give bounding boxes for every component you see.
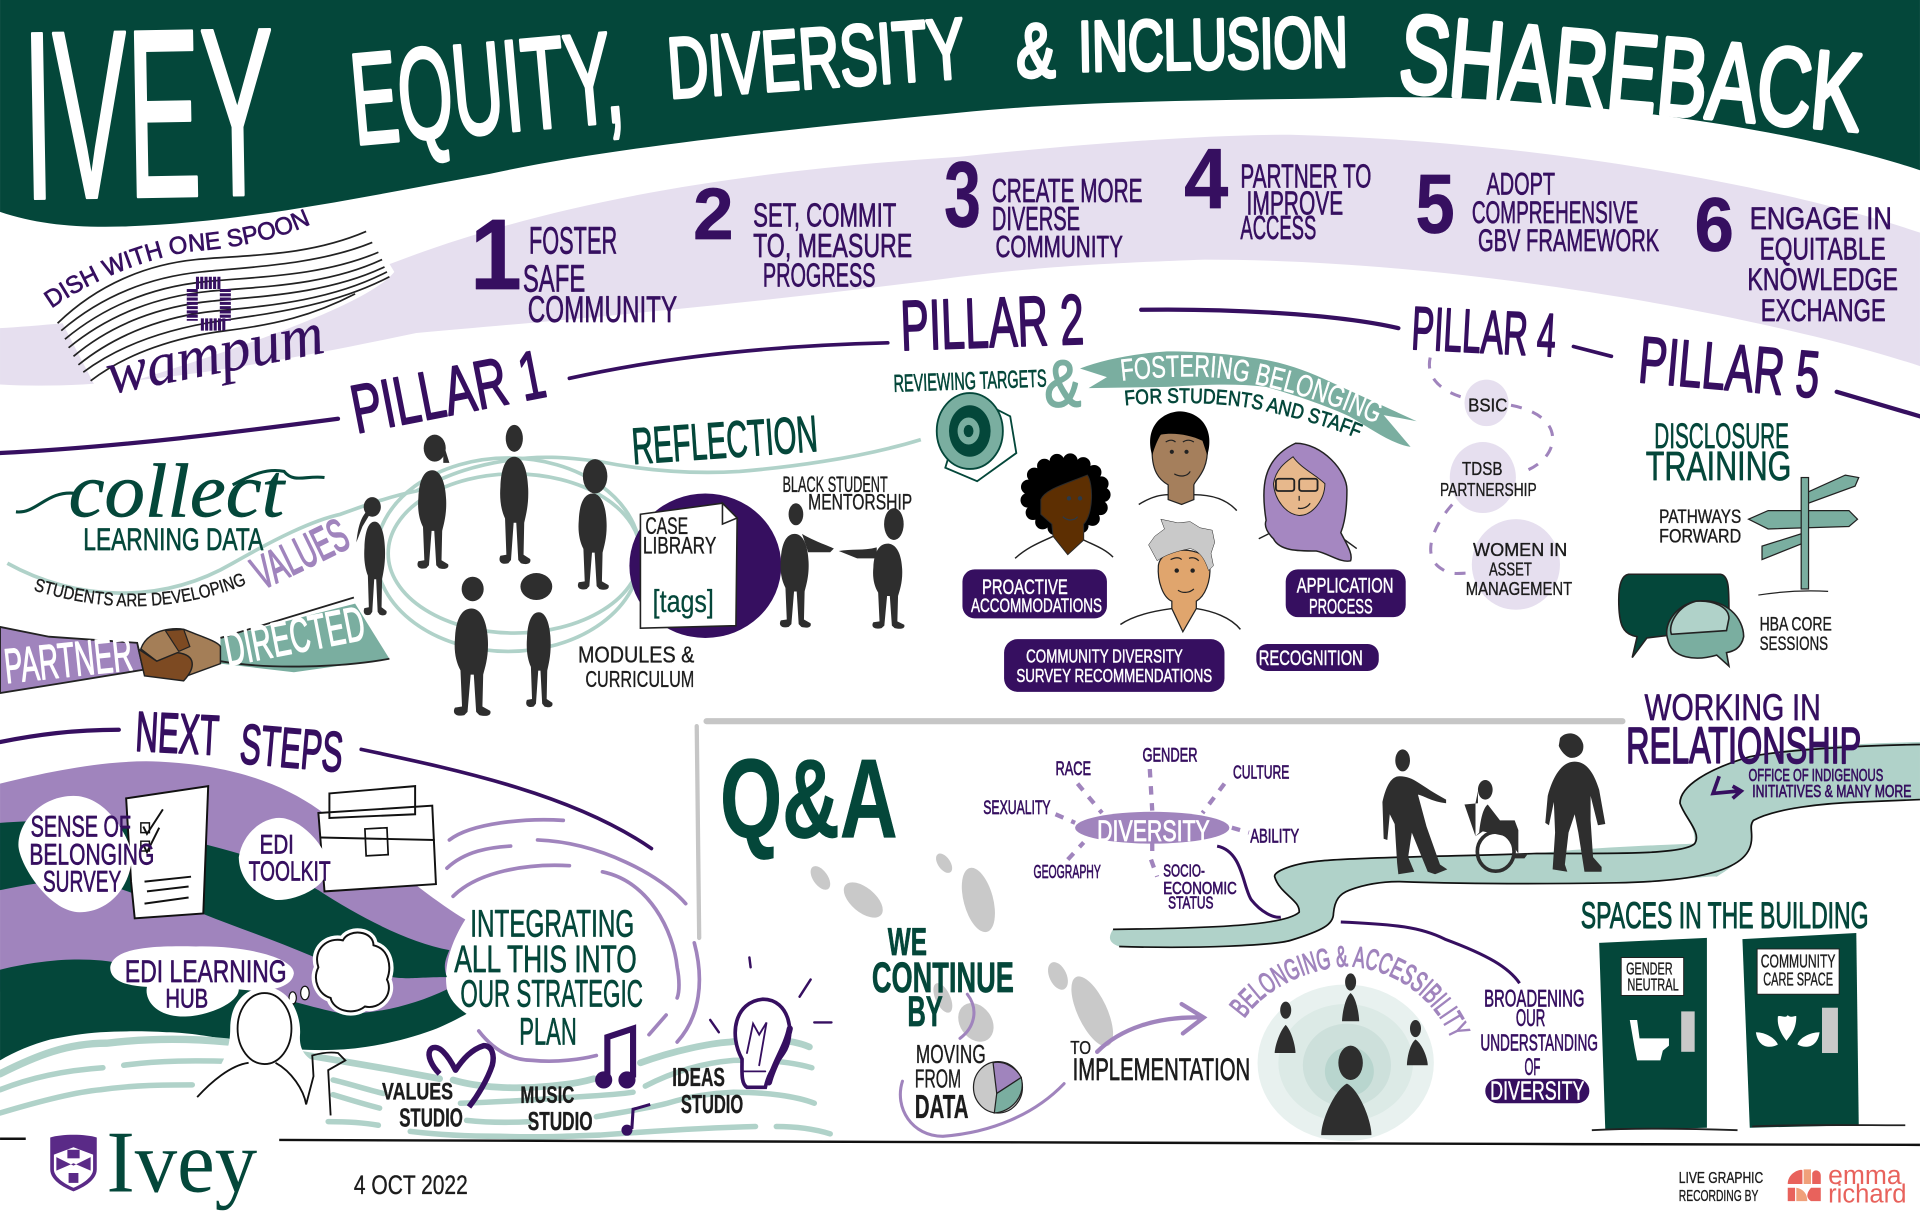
label: modules and curriculum: MODULES & (578, 641, 695, 667)
teal ampersand: & (1044, 348, 1081, 422)
pill: proactive accommodations (962, 569, 1107, 618)
priority 6 (1695, 183, 1898, 328)
priority 2 (693, 172, 912, 295)
mentorship figures (780, 503, 904, 629)
pill: proactive accommodations: ACCOMMODATIONS (971, 595, 1102, 617)
music studio (520, 1082, 593, 1136)
diversity web: SEXUALITY (983, 797, 1051, 819)
heading: learning data: LEARNING DATA (83, 521, 264, 557)
pillar 4 list: WOMEN IN (1473, 539, 1567, 560)
label: black student mentorship: BLACK STUDENT (782, 472, 888, 497)
text: moving from data: DATA (915, 1089, 969, 1126)
text: broadening our understanding of diversity: BROADENING (1484, 985, 1584, 1012)
label: hba core sessions (1760, 614, 1832, 655)
text: moving from data: MOVING (916, 1041, 986, 1069)
door: community care space: CARE SPACE (1763, 969, 1833, 990)
ideas studio: STUDIO (681, 1091, 743, 1119)
floor lines (1592, 1125, 1905, 1130)
icon: pie chart (973, 1062, 1022, 1113)
diversity web (983, 745, 1299, 917)
icon: thought cloud (289, 933, 389, 1011)
priority 3: COMMUNITY (996, 230, 1123, 264)
label: black student mentorship (782, 472, 912, 514)
pillar 4 list: PARTNERSHIP (1440, 479, 1537, 500)
icon: dish with one spoon wampum (58, 228, 394, 392)
pillar 4 list: ASSET (1489, 558, 1532, 579)
diversity web: DIVERSITY (1097, 815, 1210, 848)
handshake: partner directed: PARTNER (2, 627, 135, 694)
pill: community diversity survey recommendations (1004, 639, 1224, 692)
pill: community diversity survey recommendations: COMMUNITY DIVERSITY (1026, 645, 1183, 666)
values studio (382, 1079, 463, 1132)
priority 3: 3 (944, 143, 981, 247)
pill: application process: APPLICATION (1297, 575, 1393, 598)
footer rule (0, 1139, 1920, 1145)
priority 3 (944, 143, 1142, 264)
banner: fostering belonging: FOR STUDENTS AND STAFF (1124, 388, 1364, 436)
figures on the river (1382, 733, 1605, 874)
credit: live graphic recording by: RECORDING BY (1679, 1188, 1759, 1205)
priority 1 (470, 199, 677, 330)
priority 4: 4 (1184, 131, 1228, 227)
priority 5: GBV FRAMEWORK (1478, 222, 1659, 258)
river path (1110, 742, 1920, 947)
label: pathways forward: PATHWAYS (1659, 506, 1741, 528)
text: we continue by: BY (907, 988, 943, 1036)
priority 4: PARTNER TO (1240, 158, 1371, 195)
heading: Q&A: Q&A (720, 736, 898, 862)
values studio: VALUES (382, 1079, 453, 1106)
label: pathways forward (1659, 506, 1741, 547)
icon: speech bubbles (1619, 574, 1744, 666)
bubble: EDI toolkit: TOOLKIT (249, 855, 331, 886)
heading: collect: collect (69, 450, 286, 534)
heading: disclosure training: TRAINING (1646, 443, 1791, 489)
lavender priorities band (0, 135, 1920, 386)
next steps heading: STEPS (238, 712, 346, 784)
priority 1: 1 (470, 199, 522, 311)
priority 2: TO, MEASURE (753, 228, 912, 265)
priority 2: 2 (693, 172, 733, 255)
bubble: sense of belonging survey: SURVEY (43, 865, 121, 898)
heading: pillar 2: PILLAR 2 (899, 281, 1085, 366)
priority 5 (1415, 158, 1659, 258)
connector to broadening (1341, 922, 1520, 983)
diversity web: ECONOMIC (1163, 878, 1237, 898)
portrait: man (1139, 411, 1237, 511)
diversity web: SOCIO- (1163, 861, 1205, 881)
text: broadening our understanding of diversity: OUR (1516, 1005, 1545, 1032)
heading: pillar 5: PILLAR 5 (1636, 323, 1823, 413)
text: to implementation: IMPLEMENTATION (1073, 1051, 1250, 1087)
label: hba core sessions: HBA CORE (1760, 614, 1832, 636)
banner: fostering belonging (1080, 351, 1416, 447)
logo: emma richard (1788, 1162, 1906, 1208)
portrait: older person with grey hair (1120, 519, 1240, 632)
door: community care space (1742, 933, 1859, 1128)
text: broadening our understanding of diversity: DIVERSITY (1490, 1078, 1584, 1106)
office of indigenous initiatives (1713, 765, 1911, 801)
logo: Ivey wordmark: Ivey (107, 1113, 257, 1211)
icon: heart (429, 1046, 493, 1107)
pill: application process (1286, 569, 1406, 618)
priority 3: DIVERSE (992, 201, 1080, 238)
people circle (356, 425, 609, 716)
text: broadening our understanding of diversity: UNDERSTANDING (1480, 1030, 1598, 1056)
case library: LIBRARY (643, 532, 716, 559)
credit: live graphic recording by (1679, 1170, 1763, 1205)
ideas studio: IDEAS (672, 1064, 725, 1092)
priority 4: ACCESS (1240, 210, 1316, 247)
next steps wavy stripes (0, 761, 467, 1060)
label: pathways forward: FORWARD (1659, 525, 1741, 547)
next steps heading (134, 700, 346, 784)
priority 2: PROGRESS (763, 258, 876, 295)
icon: target (937, 393, 1016, 481)
purple swirl arcs (447, 820, 699, 1061)
pillar 1 flowing teal lines (7, 440, 921, 651)
heading: working in: WORKING IN (1644, 687, 1821, 728)
case library: CASE (645, 513, 688, 540)
text: we continue by: CONTINUE (872, 954, 1014, 1002)
arc heading: belonging and accessibility: BELONGING & ACCESSIBILITY (1228, 946, 1471, 1036)
logo: emma richard: emma (1828, 1162, 1902, 1190)
priority 1: FOSTER (529, 220, 617, 262)
bubble: EDI toolkit (239, 786, 436, 900)
text: integrating all this into our strategic plan: ALL THIS INTO (454, 939, 637, 981)
diversity web: GEOGRAPHY (1033, 861, 1101, 882)
text: integrating all this into our strategic plan: PLAN (519, 1011, 577, 1053)
title: ampersand: & (1016, 9, 1056, 94)
pillar 4 list: BSIC (1468, 394, 1507, 415)
portrait: woman with curly hair (1015, 460, 1113, 558)
door: community care space: COMMUNITY (1761, 950, 1835, 971)
label: hba core sessions: SESSIONS (1760, 633, 1828, 655)
door: gender neutral (1599, 938, 1707, 1130)
label: wampum: wampum (100, 299, 329, 408)
pill: recognition: RECOGNITION (1259, 647, 1363, 670)
pillar 4 list: MANAGEMENT (1466, 578, 1572, 599)
label: modules and curriculum (578, 641, 695, 692)
label: modules and curriculum: CURRICULUM (585, 666, 694, 692)
bubble: EDI learning hub (110, 946, 294, 1017)
text: to implementation: TO (1070, 1037, 1091, 1058)
priority 2: SET, COMMIT (753, 198, 896, 235)
bubble: EDI toolkit: EDI (260, 829, 294, 859)
text: moving from data (915, 1041, 986, 1126)
pillar 4 list: TDSB (1462, 458, 1502, 479)
icon: signpost (1749, 475, 1859, 595)
label: dish with one spoon: DISH WITH ONE SPOON (43, 209, 310, 308)
diversity web: ABILITY (1250, 825, 1299, 847)
diversity web: GENDER (1142, 745, 1198, 767)
text: integrating all this into our strategic plan: OUR STRATEGIC (460, 973, 643, 1015)
text: values: VALUES (244, 508, 357, 599)
heading: disclosure training (1646, 416, 1791, 489)
text: integrating all this into our strategic plan (454, 904, 643, 1053)
heading: disclosure training: DISCLOSURE (1654, 416, 1789, 456)
music studio: MUSIC (520, 1082, 574, 1109)
bubble: sense of belonging survey: SENSE OF (31, 810, 131, 843)
portrait: woman in hijab (1259, 443, 1357, 561)
curved arrows (900, 994, 1204, 1136)
collect flourish (16, 470, 325, 512)
logo: Ivey shield (50, 1135, 97, 1191)
logo: emma richard: richard (1828, 1180, 1906, 1208)
text: we continue by (872, 921, 1014, 1036)
door: gender neutral: GENDER (1626, 959, 1673, 979)
person looking at ideas (196, 987, 345, 1115)
teal ripples (0, 1039, 830, 1137)
priority 4 (1184, 131, 1371, 247)
next steps heading: NEXT (134, 700, 221, 767)
diversity web: CULTURE (1233, 762, 1289, 783)
bubble: EDI learning hub: EDI LEARNING (125, 953, 287, 989)
text: students are developing: STUDENTS ARE DEVELOPING (34, 574, 246, 606)
case library: [tags] (653, 583, 714, 619)
text: broadening our understanding of diversity (1480, 985, 1598, 1106)
heading: pillar 1: PILLAR 1 (345, 335, 552, 448)
handshake: partner directed: DIRECTED (220, 597, 369, 677)
belonging swirl (1258, 973, 1434, 1141)
priority 5: 5 (1415, 158, 1455, 251)
text: to implementation (1070, 1037, 1250, 1087)
pillar connector lines (0, 310, 1920, 849)
music studio: STUDIO (528, 1108, 593, 1136)
pill: proactive accommodations: PROACTIVE (982, 576, 1068, 599)
bubble: EDI learning hub: HUB (165, 984, 208, 1014)
label: black student mentorship: MENTORSHIP (808, 489, 912, 514)
footsteps (807, 851, 1122, 1052)
heading: pillar 4: PILLAR 4 (1410, 294, 1558, 370)
diversity web: RACE (1056, 758, 1091, 780)
banner: fostering belonging: FOSTERING BELONGING (1121, 355, 1382, 422)
heading: reflection: REFLECTION (630, 404, 820, 475)
bubble: sense of belonging survey: BELONGING (29, 838, 154, 871)
credit: live graphic recording by: LIVE GRAPHIC (1679, 1170, 1763, 1187)
date: 4 OCT 2022 (354, 1170, 468, 1200)
ideas studio (672, 1064, 743, 1119)
text: moving from data: FROM (915, 1065, 961, 1093)
text: we continue by: WE (888, 921, 927, 964)
handshake: partner directed (0, 597, 389, 694)
priority 5: COMPREHENSIVE (1472, 194, 1638, 230)
header banner (0, 0, 1920, 249)
diversity web: STATUS (1168, 893, 1213, 913)
case library (629, 493, 781, 638)
pill: community diversity survey recommendations: SURVEY RECOMMENDATIONS (1016, 665, 1212, 686)
pillar 4 list (1429, 358, 1572, 610)
priority 3: CREATE MORE (992, 173, 1142, 210)
text: reviewing targets: REVIEWING TARGETS (893, 365, 1047, 398)
priority 1: SAFE (523, 258, 585, 300)
door: gender neutral: NEUTRAL (1627, 975, 1679, 995)
priority 4: IMPROVE (1247, 185, 1343, 222)
priority 6: 6 (1695, 183, 1734, 268)
Q&A divider (697, 721, 1622, 938)
title: Inclusion: INCLUSION (1078, 3, 1348, 87)
text: broadening our understanding of diversity: OF (1524, 1054, 1540, 1081)
values studio: STUDIO (399, 1104, 463, 1132)
text: integrating all this into our strategic plan: INTEGRATING (470, 904, 634, 946)
priority 5: ADOPT (1487, 166, 1555, 202)
icon: light bulb (710, 958, 831, 1087)
icon: music notes (595, 1029, 650, 1136)
priority 1: COMMUNITY (528, 289, 677, 330)
bubble: sense of belonging survey (18, 786, 208, 918)
pill: application process: PROCESS (1309, 595, 1373, 618)
